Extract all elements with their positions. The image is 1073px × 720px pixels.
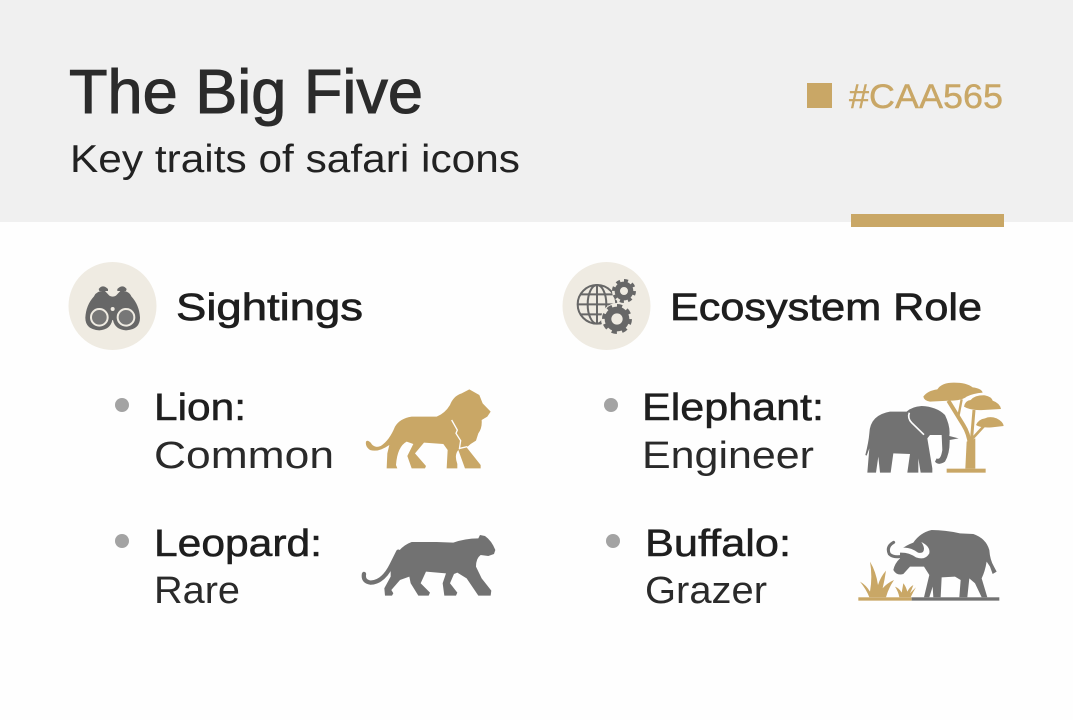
title: The Big Five <box>69 58 423 127</box>
panel: ecosystem role <box>562 262 1004 612</box>
bullet: lion <box>115 398 129 412</box>
icon: lion <box>366 389 491 468</box>
label: elephant engineer <box>642 387 824 477</box>
label: lion common <box>154 387 334 477</box>
icon: elephant with acacia tree <box>865 383 1004 473</box>
heading: ecosystem role: Ecosystem Role <box>670 287 982 329</box>
icon: buffalo with grass <box>858 530 999 601</box>
label: elephant engineer: Engineer <box>642 435 814 477</box>
header band <box>0 0 1073 222</box>
label: lion common: Common <box>154 435 334 477</box>
bullet: buffalo <box>606 534 620 548</box>
label: leopard rare: Rare <box>154 570 240 612</box>
panel: sightings <box>68 262 495 612</box>
label: buffalo grazer: Grazer <box>645 570 767 612</box>
icon: binoculars <box>68 262 156 350</box>
label: elephant engineer: Elephant: <box>642 387 824 429</box>
subtitle: Key traits of safari icons <box>70 138 520 181</box>
label: leopard rare: Leopard: <box>154 523 322 565</box>
icon: globe and gears <box>562 262 650 350</box>
icon: leopard <box>364 535 495 596</box>
label: buffalo grazer: Buffalo: <box>645 523 791 565</box>
label: lion common: Lion: <box>154 387 246 429</box>
label: buffalo grazer <box>645 523 791 612</box>
gold accent bar <box>851 214 1004 227</box>
bullet: elephant <box>604 398 618 412</box>
bullet: leopard <box>115 534 129 548</box>
heading: sightings: Sightings <box>176 287 363 329</box>
label: leopard rare <box>154 523 322 612</box>
colour swatch with hex label: #CAA565 <box>849 78 1003 116</box>
